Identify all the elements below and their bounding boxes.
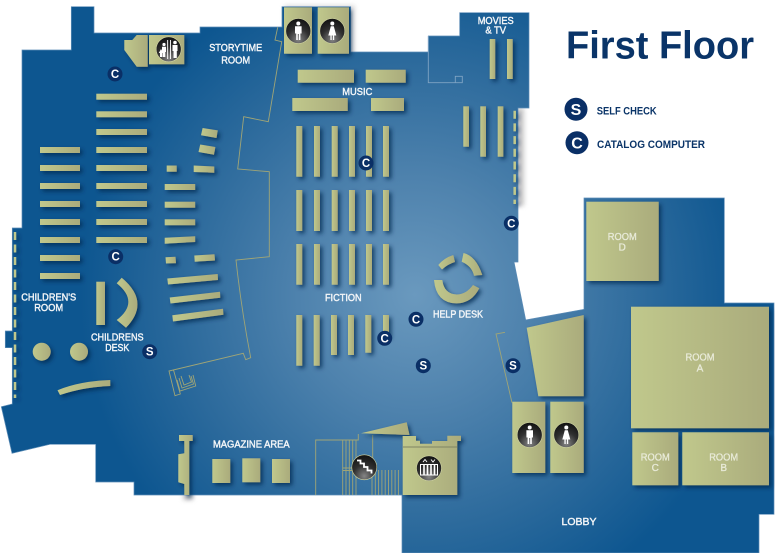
east dashed wall [513,111,516,204]
icon: family restroom [156,37,181,62]
area labels: ROOM [34,303,63,314]
area labels [21,16,597,528]
title: First Floor [566,24,754,67]
icon: elevator [416,456,442,481]
icon: men's restroom north [286,18,311,44]
catalog computer markers: C [111,69,119,81]
shelves: children's room right cluster [165,128,224,322]
interior wall lines [169,27,512,495]
room labels: B [720,463,727,474]
area labels: CHILDREN'S [21,293,76,304]
fiction shelves [296,126,389,366]
room labels: ROOM [686,352,714,363]
area labels: MOVIES [478,16,514,27]
icon: women's restroom lobby [554,422,579,448]
help desk [434,253,482,304]
area labels: CHILDRENS [91,333,144,344]
room labels: ROOM [709,452,738,463]
icon: women's restroom north [320,18,345,44]
elevator block [361,422,461,495]
magazine area shelves [178,435,290,495]
catalog computer markers: C [412,314,420,326]
legend: catalog computer [566,131,705,154]
area labels: & TV [485,26,506,37]
legend: catalog computer: C [571,135,583,152]
legend [564,98,705,154]
rooms and lobby restrooms [512,202,769,485]
legend: self check: S [571,102,582,119]
icon: stairs [352,455,377,480]
catalog computer markers: C [381,333,389,345]
movies and tv shelves [490,39,513,79]
catalog computer markers: C [362,158,370,170]
room labels: C [652,463,659,474]
catalog computer markers [108,66,519,346]
area labels: MUSIC [342,87,372,98]
legend: catalog computer: CATALOG COMPUTER [597,139,705,151]
area labels: FICTION [325,293,362,304]
area labels: ROOM [221,55,250,66]
restrooms north [284,7,349,54]
room labels: ROOM [608,232,637,243]
room labels: A [697,363,704,374]
children's desk [96,278,138,328]
music shelves [292,70,406,111]
room labels: D [619,243,626,254]
legend: self check [564,98,657,121]
self check markers: S [509,361,517,373]
room labels: ROOM [641,452,670,463]
catalog computer markers: C [507,218,515,230]
shelves: children's room left column [40,147,80,279]
children's room dashed wall [14,232,16,398]
east shelves [463,106,503,157]
self check markers: S [419,361,427,373]
area labels: LOBBY [562,517,597,528]
children's tables and bench [33,343,110,395]
self check markers: S [146,347,154,359]
icon: men's restroom lobby [517,422,542,448]
area labels: HELP DESK [433,309,483,320]
room labels [608,232,738,474]
family restroom block [124,35,184,67]
area labels: STORYTIME [209,43,262,54]
self check markers [142,344,520,373]
area labels: DESK [105,343,130,354]
area labels: MAGAZINE AREA [213,439,290,450]
shelves: children's room middle column [96,94,147,243]
legend: self check: SELF CHECK [597,105,657,117]
catalog computer markers: C [112,252,120,264]
